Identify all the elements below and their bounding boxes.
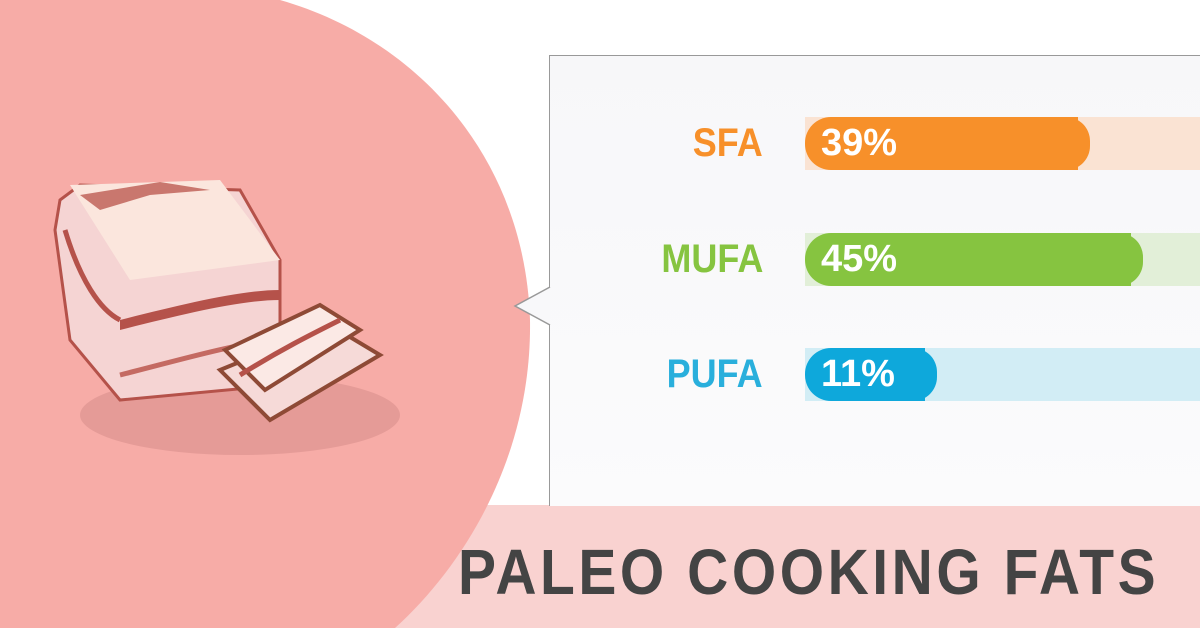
panel: chart panel — [549, 55, 1200, 506]
text: 39% — [821, 122, 897, 164]
title: PALEO COOKING FATS — [458, 536, 1159, 608]
bar: PUFA — [667, 348, 1200, 401]
text: PUFA — [667, 352, 763, 396]
bar: SFA — [693, 117, 1200, 170]
icon: bacon slab — [54, 180, 400, 455]
text: MUFA — [661, 237, 763, 281]
text: SFA — [693, 121, 763, 165]
bar: MUFA — [661, 233, 1200, 286]
text: 11% — [821, 353, 895, 395]
bottom band — [0, 505, 1200, 628]
pointer arrow — [515, 287, 550, 325]
text: 45% — [821, 238, 897, 280]
